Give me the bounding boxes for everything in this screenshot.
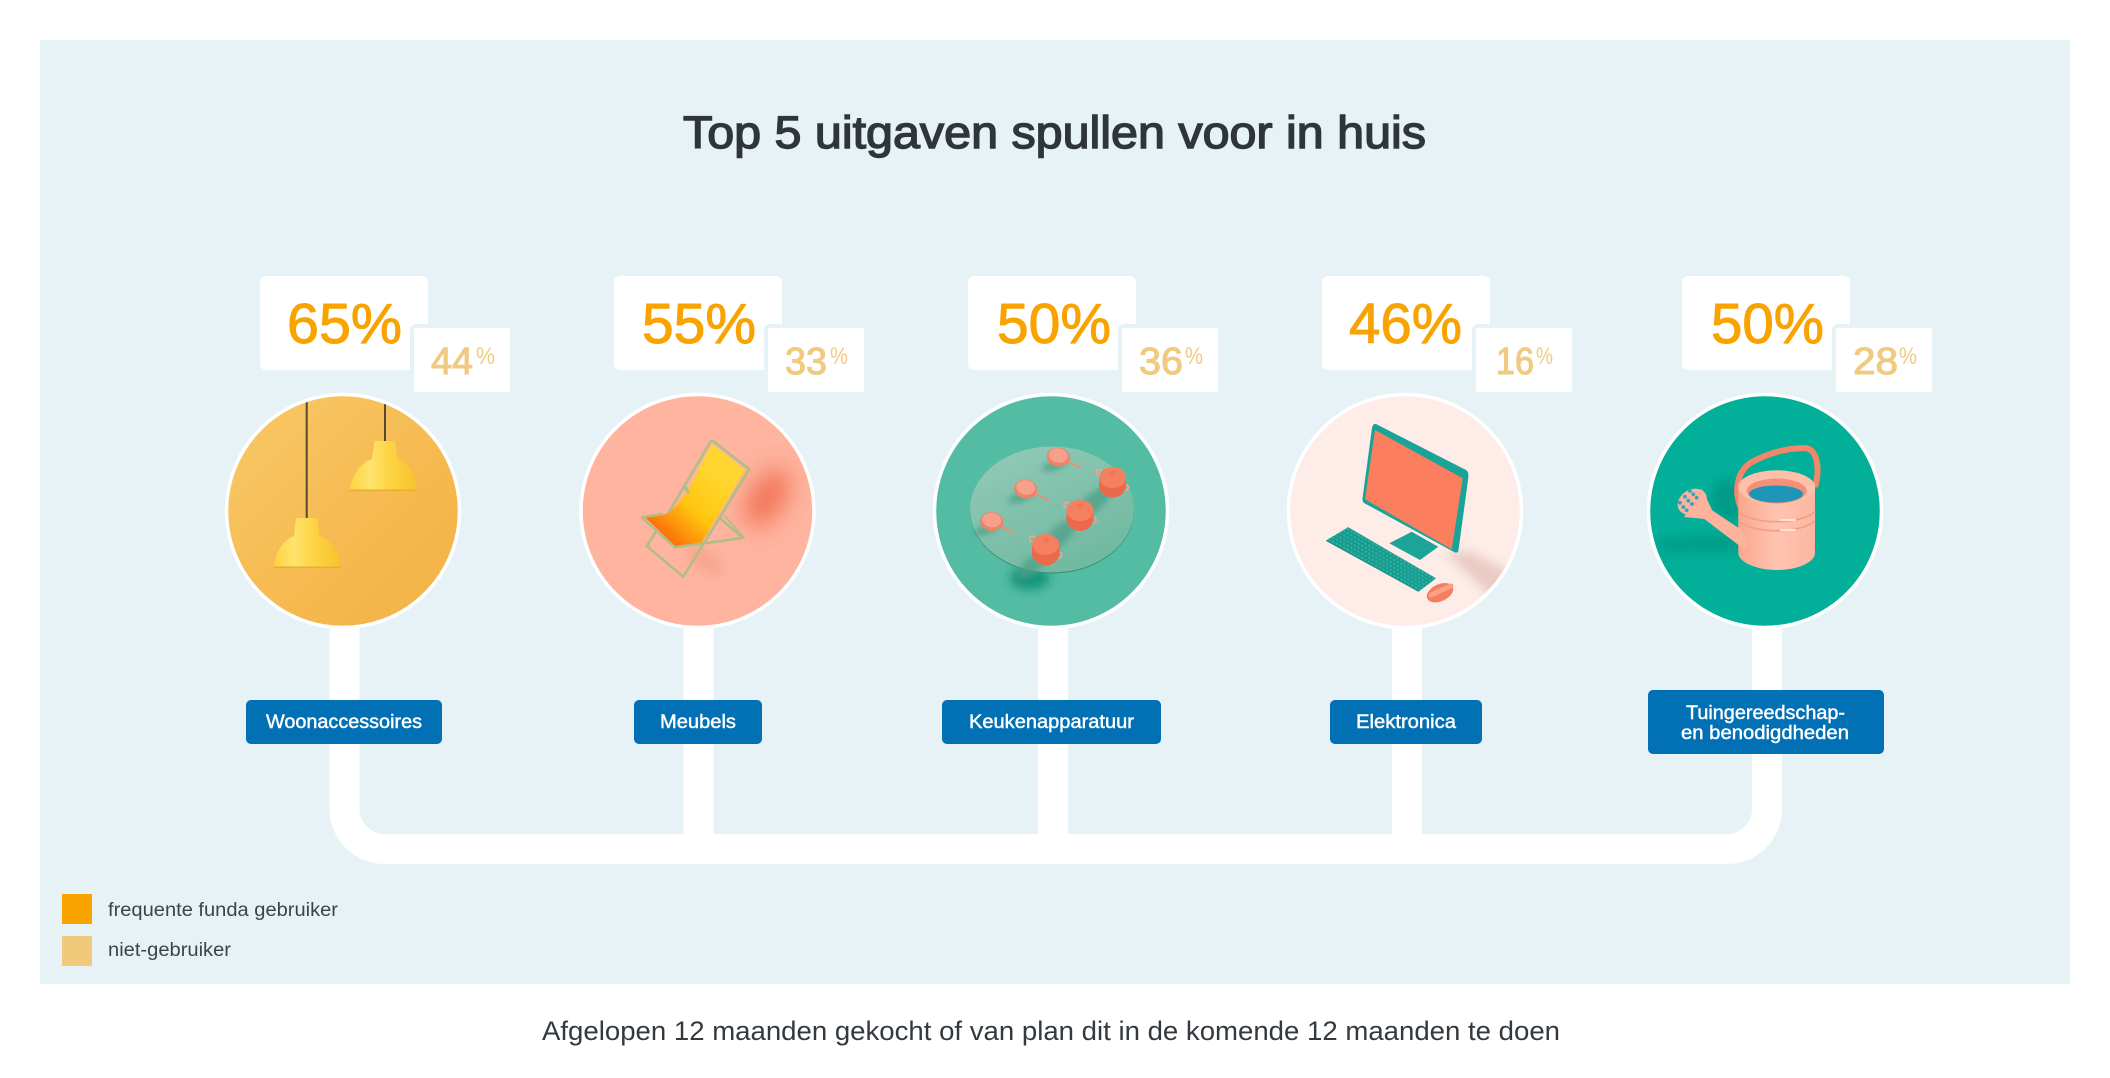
small value 36%: % (1185, 343, 1203, 370)
small value 33%: % (830, 343, 848, 370)
icon: watering can (1650, 396, 1880, 626)
icon: desktop computer (1290, 396, 1525, 626)
connector track (344, 600, 1767, 849)
legend item: frequente funda gebruiker: frequente funda gebruiker (108, 900, 339, 921)
small value 16%: 16 (1496, 341, 1534, 383)
category label: en benodigdheden (1681, 722, 1849, 744)
column: Tuingereedschap- en benodigdheden (1648, 276, 1936, 754)
category label: Woonaccessoires (266, 711, 422, 733)
legend (62, 894, 339, 966)
small value 33%: 33 (785, 341, 827, 383)
small value 44%: 44 (431, 341, 473, 383)
big value 50%: 50% (1711, 292, 1824, 356)
big value 46%: 46% (1349, 292, 1462, 356)
big value 46% (1322, 276, 1490, 370)
small value 33% (764, 324, 868, 396)
small value 16% (1472, 324, 1576, 396)
small value 16%: % (1536, 343, 1553, 370)
big value 50%: 50% (997, 292, 1111, 356)
icon: pots and pans on plate (936, 396, 1166, 626)
legend item: frequente funda gebruiker (62, 894, 339, 924)
big value 50% (968, 276, 1136, 370)
circle outline (934, 394, 1168, 628)
category label (246, 700, 442, 744)
category label (1330, 700, 1482, 744)
legend item: niet-gebruiker (62, 936, 232, 966)
circle outline (1648, 394, 1882, 628)
column: Keukenapparatuur (934, 276, 1222, 744)
big value 50% (1682, 276, 1850, 370)
small value 36%: 36 (1139, 341, 1183, 383)
circle outline (581, 394, 814, 628)
category label: Tuingereedschap- (1686, 702, 1845, 724)
title: Top 5 uitgaven spullen voor in huis (683, 107, 1426, 158)
icon: pendant lamps (228, 396, 458, 626)
category label (942, 700, 1161, 744)
icon: deck chair (582, 396, 812, 626)
small value 44% (410, 324, 514, 396)
category label: Meubels (660, 711, 736, 733)
legend item: niet-gebruiker: niet-gebruiker (108, 940, 232, 961)
small value 28% (1832, 324, 1936, 396)
big value 65% (260, 276, 428, 370)
big value 55% (614, 276, 782, 370)
category label (1648, 690, 1884, 754)
column: Elektronica (1288, 276, 1576, 744)
small value 36% (1118, 324, 1222, 396)
column: Meubels (581, 276, 868, 744)
small value 44%: % (476, 343, 495, 370)
small value 28%: % (1899, 343, 1917, 370)
big value 55%: 55% (642, 292, 756, 356)
category label (634, 700, 762, 744)
small value 28%: 28 (1853, 341, 1898, 383)
circle outline (1288, 394, 1522, 628)
footnote: Afgelopen 12 maanden gekocht of van plan dit in de komende 12 maanden te doen (542, 1016, 1560, 1046)
category label: Elektronica (1356, 711, 1456, 733)
circle outline (226, 394, 460, 628)
big value 65%: 65% (287, 292, 402, 356)
column: Woonaccessoires (226, 276, 514, 744)
category label: Keukenapparatuur (969, 711, 1135, 733)
